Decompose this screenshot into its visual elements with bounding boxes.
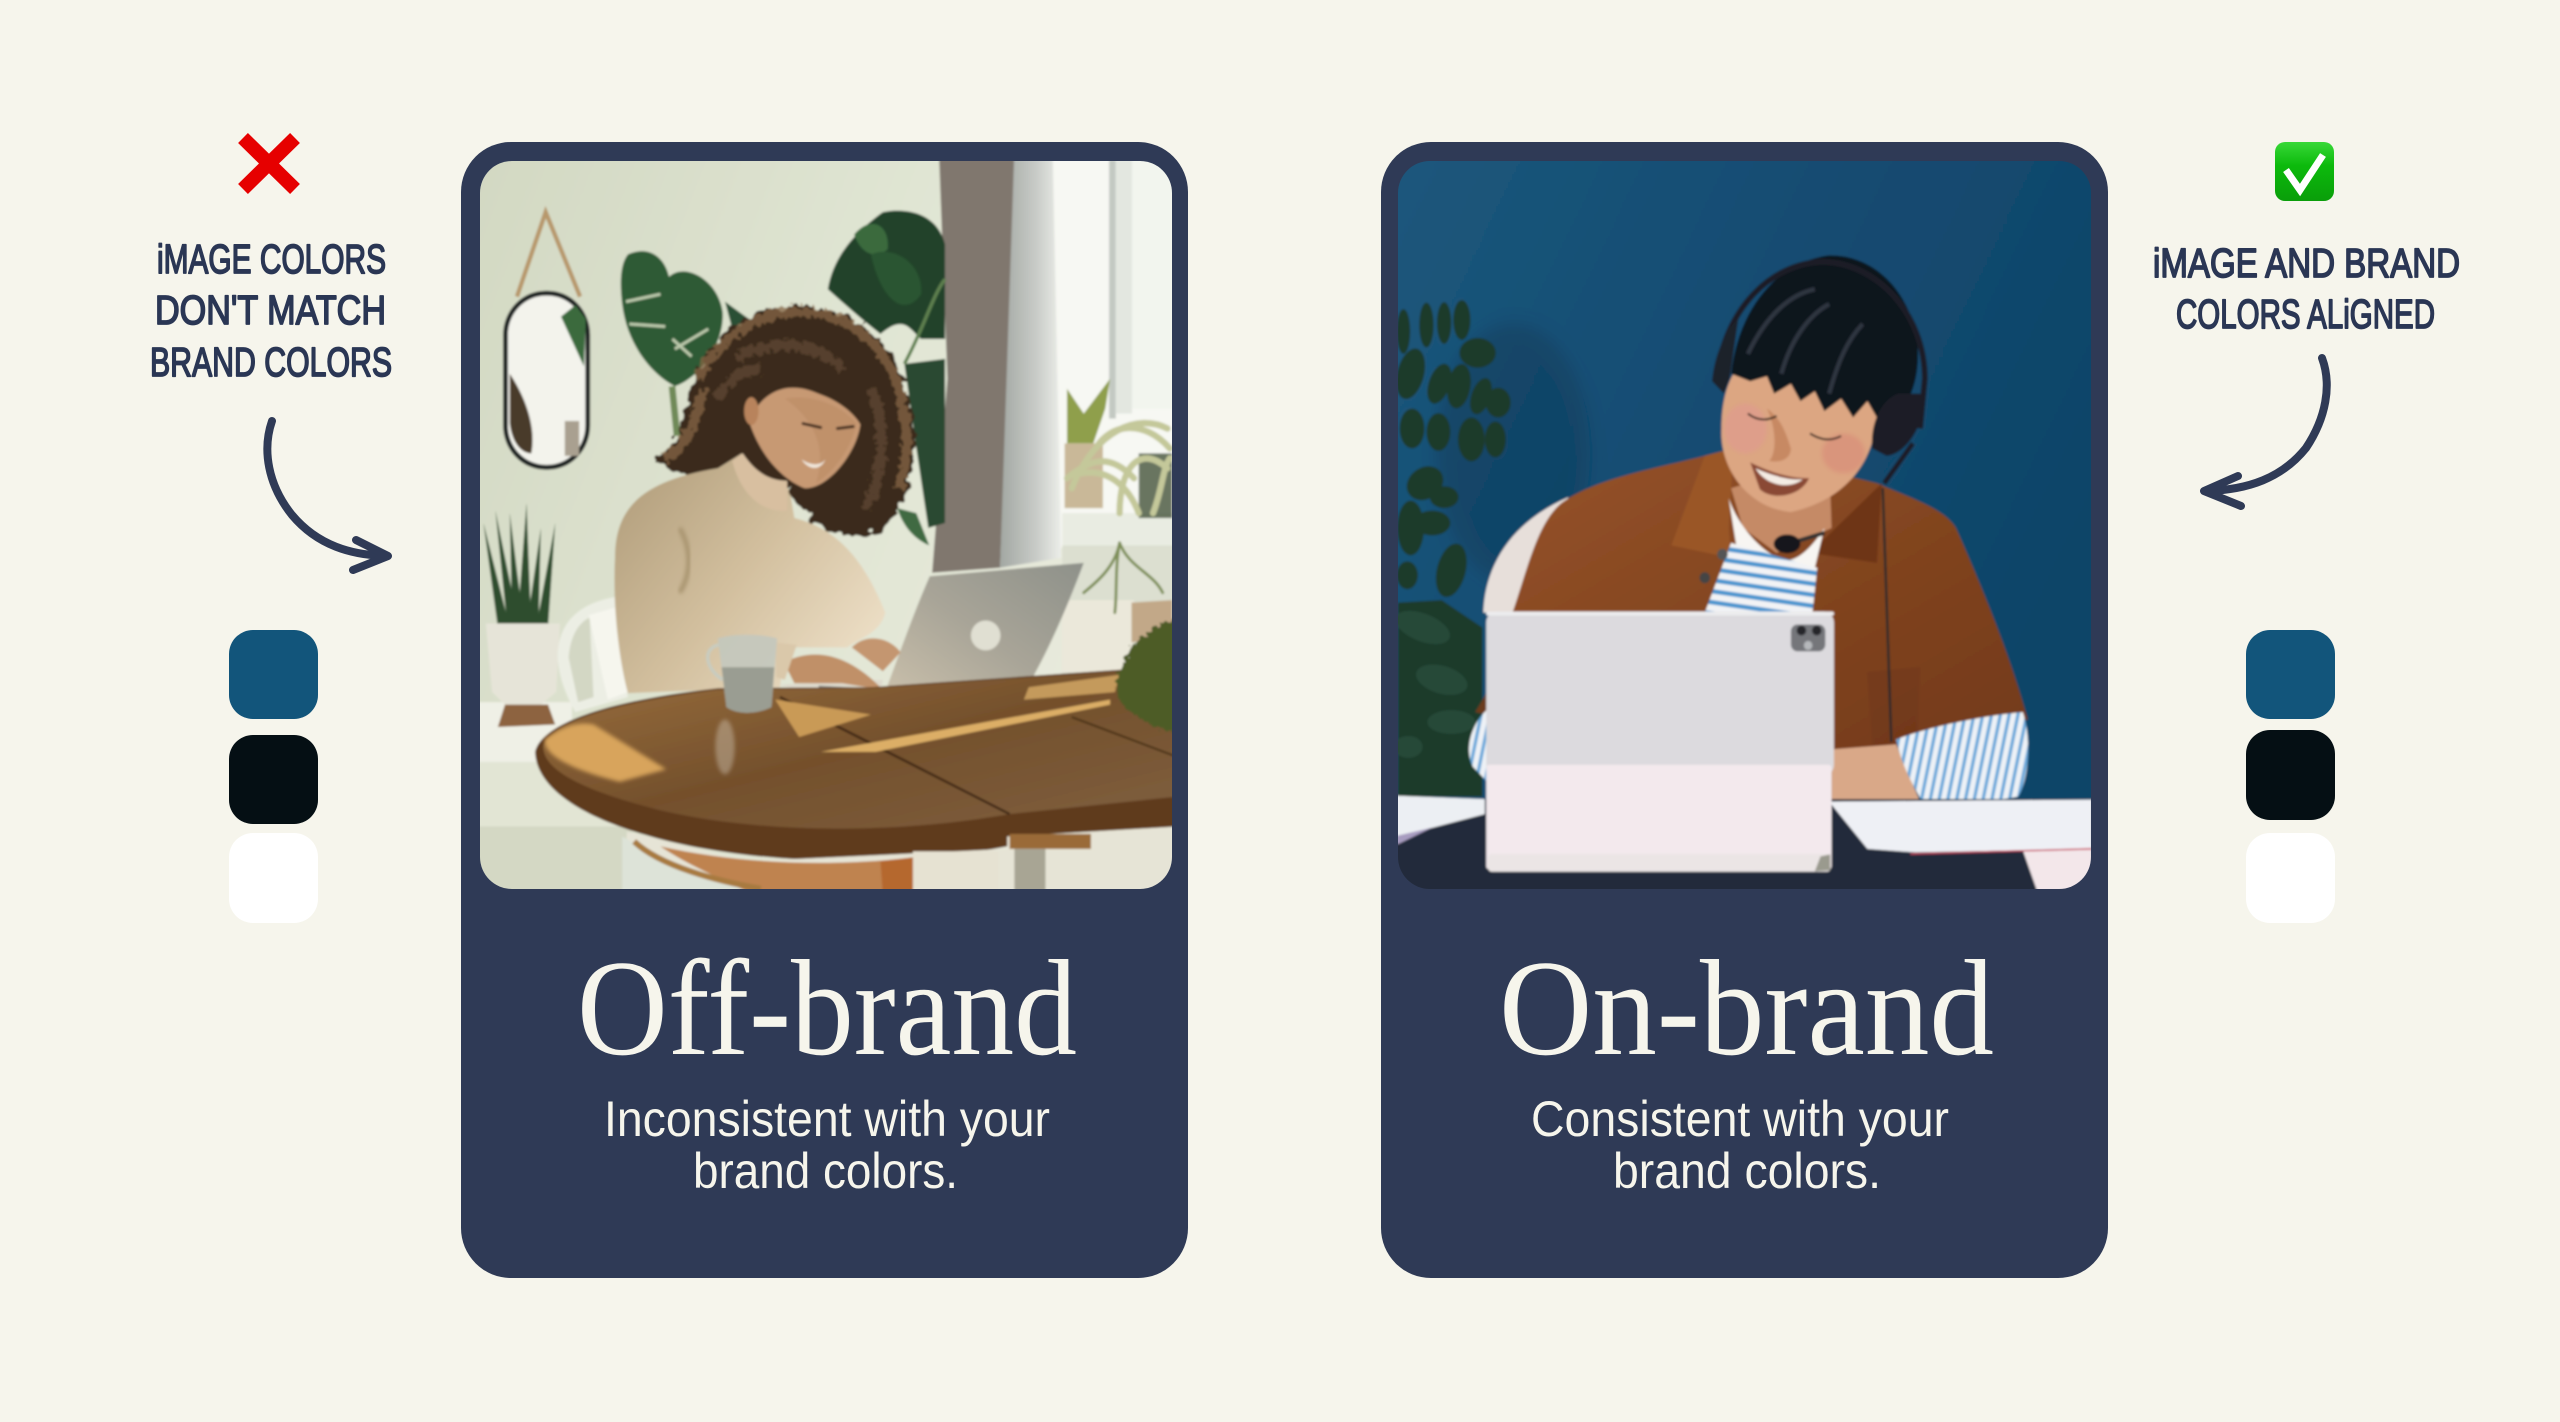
subtitle: consistent [1531, 1091, 1949, 1199]
shelf [480, 702, 572, 762]
table [1398, 797, 2072, 889]
glass [718, 634, 778, 696]
hair front [787, 379, 914, 536]
plant [1391, 300, 1511, 797]
subtitle: inconsistent: Inconsistent with your [604, 1091, 1050, 1147]
tablet [1486, 612, 1834, 776]
plant pot [486, 624, 560, 705]
heading: On-brand: On-brand [1499, 932, 1994, 1084]
under-table [626, 824, 1172, 862]
subtitle: consistent: Consistent with your [1531, 1091, 1949, 1147]
heading: Off-brand: Off-brand [577, 932, 1077, 1084]
subtitle: inconsistent: brand colors. [693, 1143, 958, 1199]
face [1721, 357, 1877, 512]
icon: green check mark [2275, 142, 2334, 201]
mirror [517, 212, 580, 297]
swatches: left brand palette [229, 630, 318, 923]
swatches: right brand palette [2246, 630, 2335, 923]
face [749, 388, 860, 488]
microphone [1791, 533, 1824, 543]
papers [1829, 800, 2092, 852]
hair back [653, 306, 913, 488]
annotation: image colors don't match brand colors: iMAGE COLORS [157, 236, 386, 282]
photo: woman at laptop in sunny room [469, 150, 1187, 896]
annotation: image colors don't match brand colors [150, 236, 392, 385]
chair [558, 597, 628, 712]
sill and radiator [1062, 513, 1177, 545]
curtains [932, 150, 1014, 573]
sleeves and arm [1832, 744, 1920, 802]
window plants [1067, 379, 1110, 443]
panel: on-brand card [1381, 142, 2108, 1278]
annotation: image colors don't match brand colors: BRAND COLORS [150, 339, 392, 385]
arrow: left annotation to off-brand card [267, 421, 388, 570]
headset [1717, 262, 1925, 428]
annotation: image and brand colors aligned: iMAGE AND BRAND [2153, 240, 2460, 286]
annotation: image colors don't match brand colors: DON'T MATCH [155, 287, 386, 333]
monstera plants [621, 251, 723, 386]
icon: red cross [243, 138, 295, 189]
snake plant [483, 503, 555, 628]
sunlight patches [545, 724, 666, 782]
sweater [614, 453, 885, 693]
photo: person with headset at tablet against blue wall [1389, 150, 2107, 899]
hands [784, 654, 883, 690]
neck and t-shirt [1730, 484, 1833, 554]
annotation: image and brand colors aligned [2153, 240, 2460, 337]
panel: off-brand card [461, 142, 1188, 1278]
subtitle: inconsistent [604, 1091, 1050, 1199]
table plant [1132, 600, 1172, 642]
laptop [887, 562, 1084, 688]
arrow: right annotation to on-brand card [2204, 358, 2327, 506]
annotation: image and brand colors aligned: COLORS ALiGNED [2176, 291, 2435, 337]
subtitle: consistent: brand colors. [1613, 1143, 1881, 1199]
table [535, 670, 1177, 861]
jacket [1513, 448, 2028, 749]
chair [1483, 497, 1568, 613]
hair [1731, 255, 1918, 420]
